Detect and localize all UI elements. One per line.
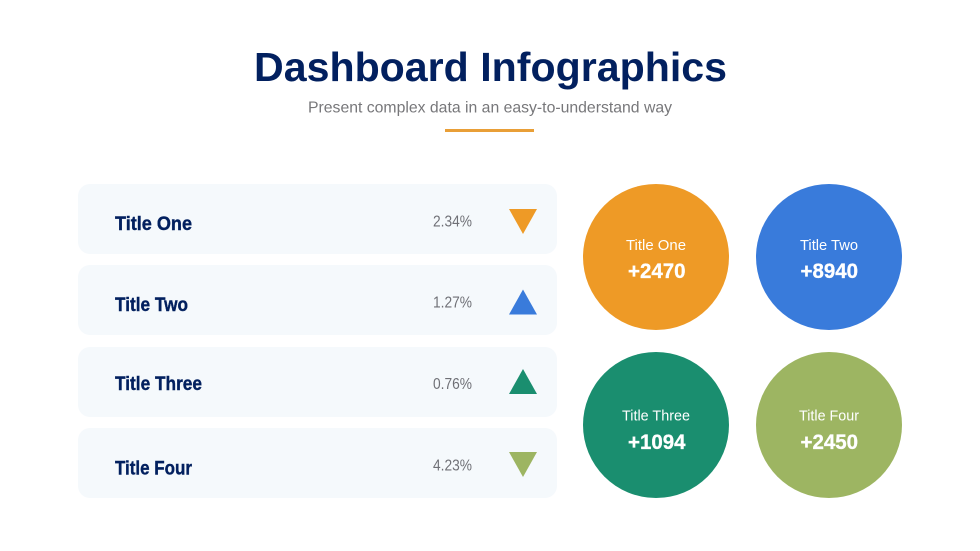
circle three value: +1094 <box>628 431 686 454</box>
row four percentage: 4.23% <box>433 458 472 474</box>
row three label: Title Three <box>115 373 202 395</box>
panel: row four <box>78 428 557 498</box>
circle two value: +8940 <box>800 260 858 283</box>
circle four label: Title Four <box>799 408 859 424</box>
row three percentage: 0.76% <box>433 376 472 393</box>
circle one value: +2470 <box>628 260 686 283</box>
title: Dashboard Infographics <box>254 44 727 90</box>
icon: blue up triangle <box>509 290 537 314</box>
icon: green up triangle <box>509 369 537 394</box>
row four label: Title Four <box>115 458 192 480</box>
circle one label: Title One <box>626 238 686 254</box>
subtitle: Present complex data in an easy-to-understand way <box>308 100 672 116</box>
circle three label: Title Three <box>622 408 690 424</box>
circle card: title four <box>756 352 902 498</box>
circle card: title two <box>756 184 902 330</box>
panel: row two <box>78 265 557 335</box>
row two percentage: 1.27% <box>433 294 472 312</box>
row two label: Title Two <box>115 294 188 316</box>
row one percentage: 2.34% <box>433 214 472 230</box>
circle four value: +2450 <box>800 431 858 454</box>
panel: row one <box>78 184 557 254</box>
circle two label: Title Two <box>800 238 858 254</box>
circle card: title three <box>583 352 729 498</box>
panel: row three <box>78 347 557 417</box>
icon: orange down triangle <box>509 209 537 234</box>
circle card: title one <box>583 184 729 330</box>
title underline accent <box>445 129 534 132</box>
icon: olive down triangle <box>509 452 537 477</box>
row one label: Title One <box>115 213 192 235</box>
